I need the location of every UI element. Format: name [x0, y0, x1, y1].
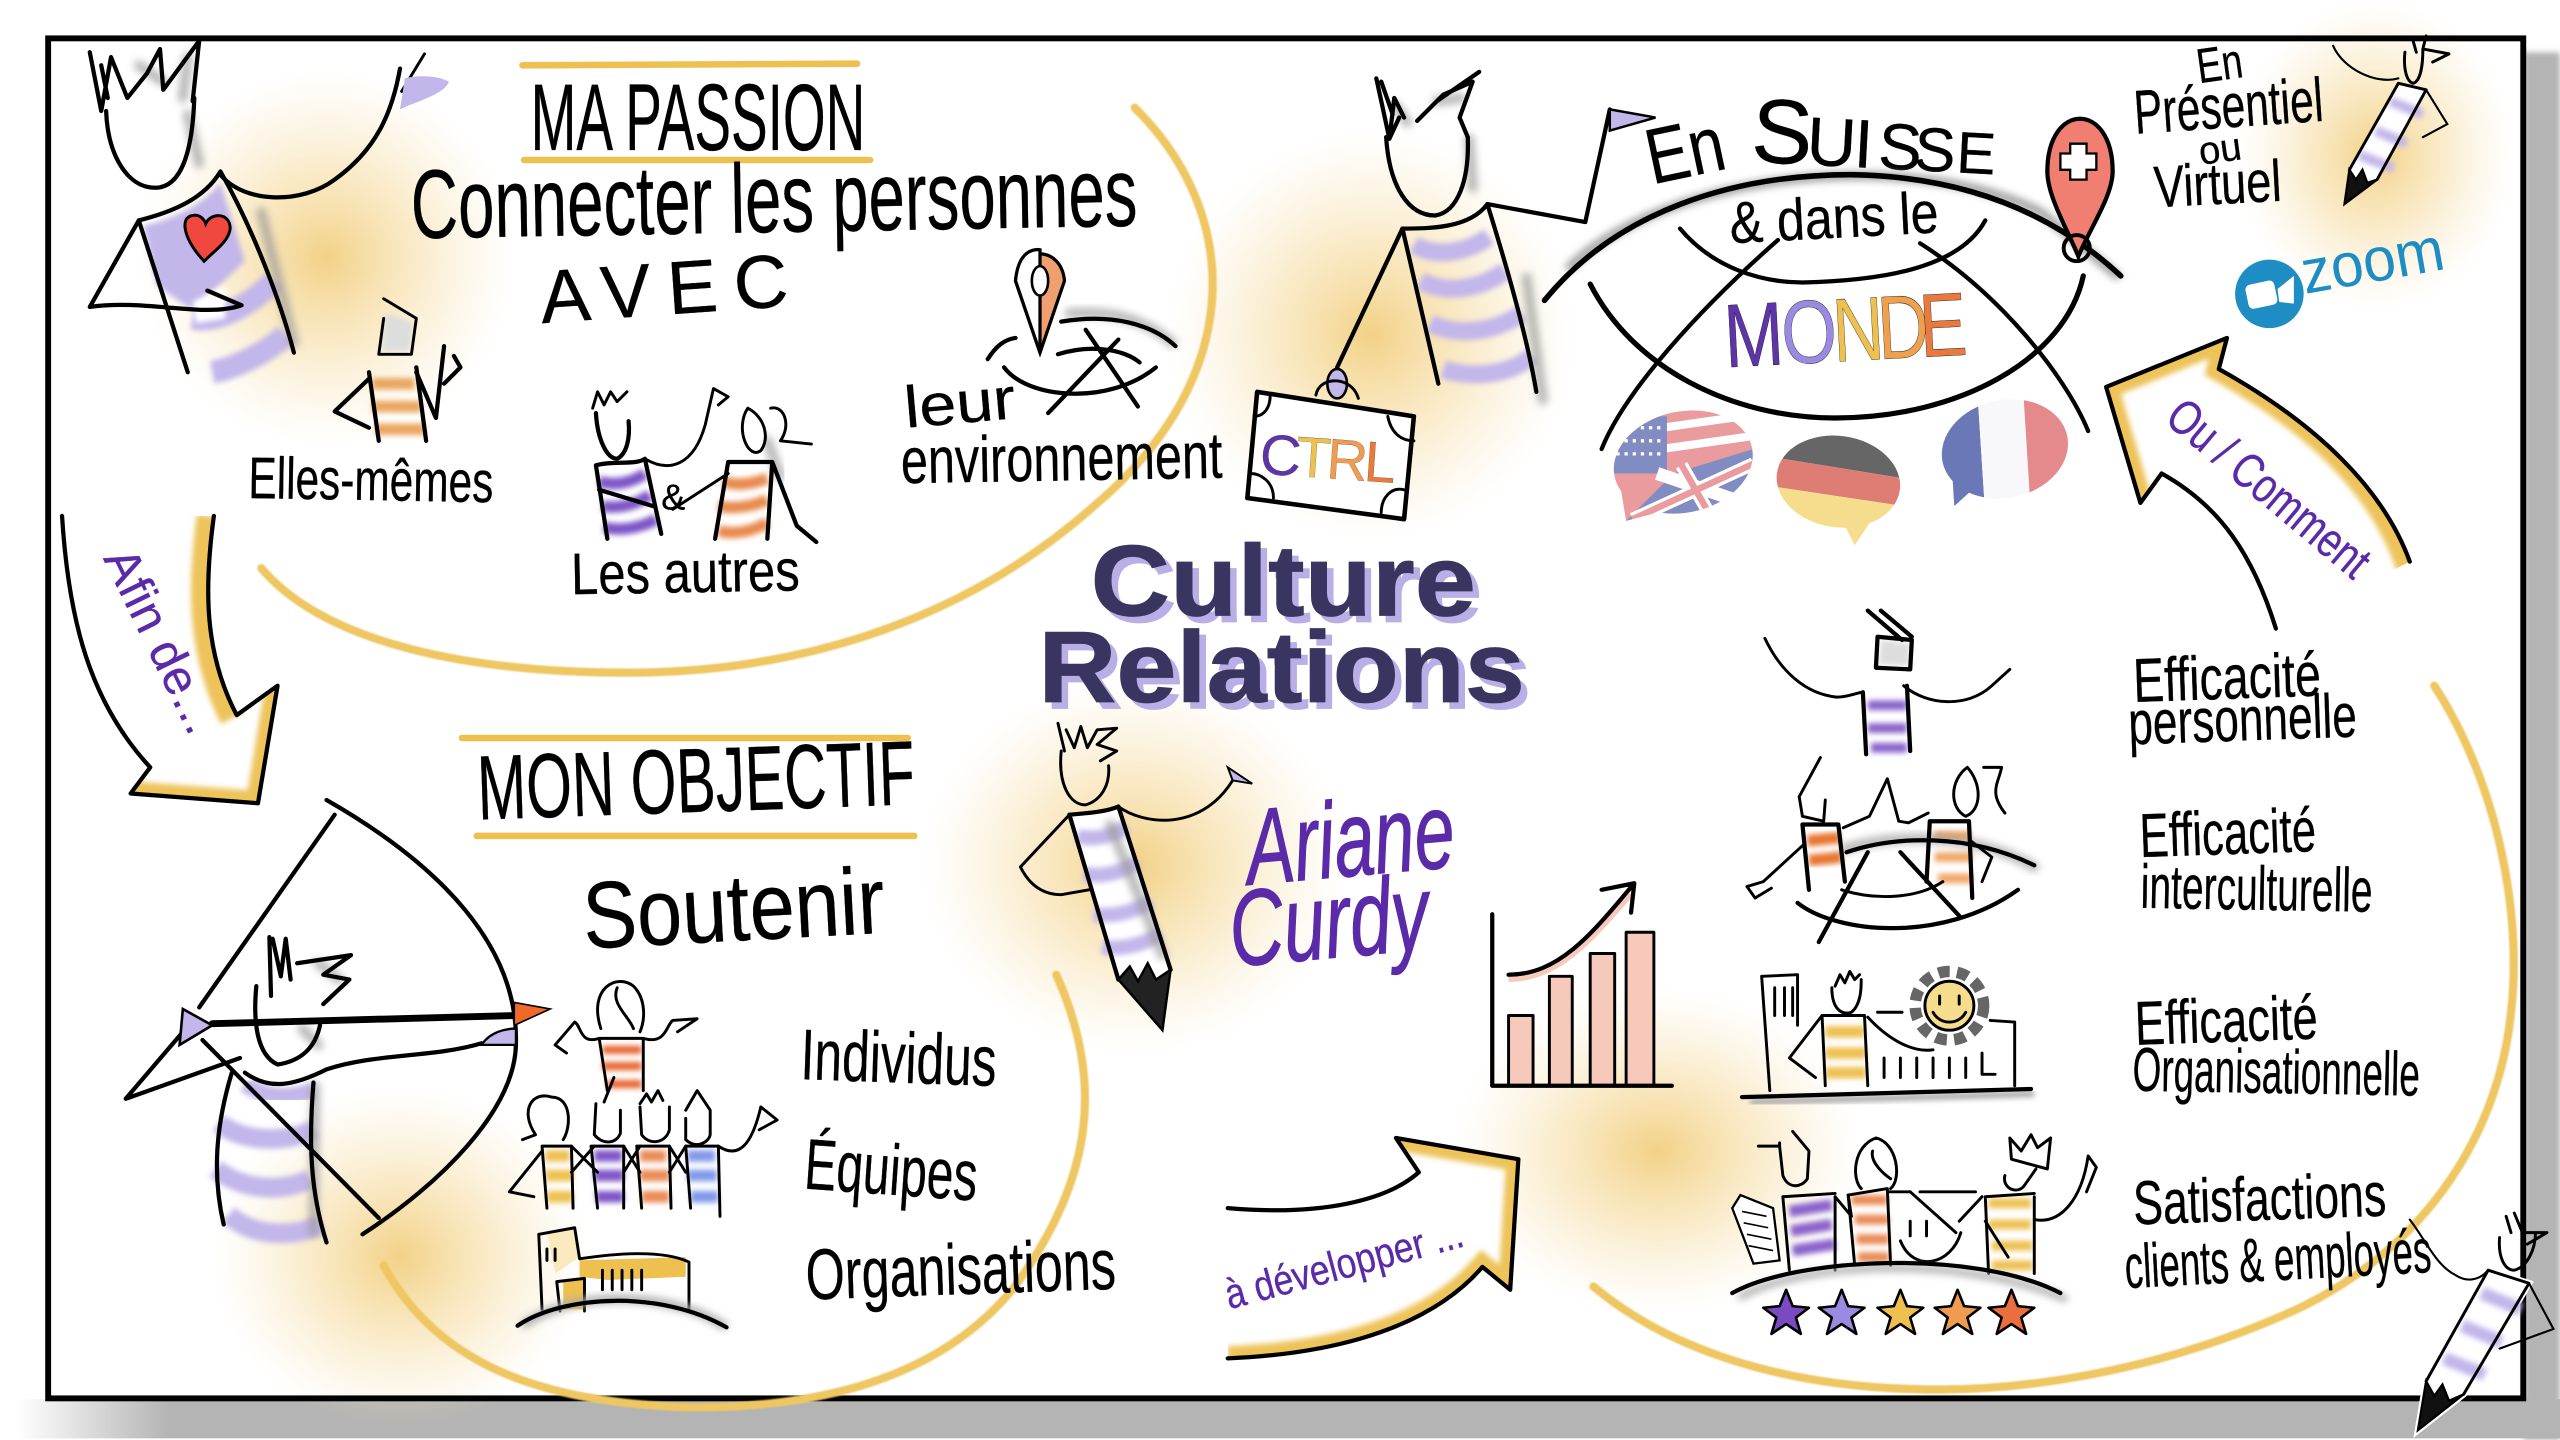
- text: les autres: Les autres: [571, 538, 800, 607]
- text: equipes: Équipes: [802, 1125, 980, 1217]
- text: dans le: & dans le: [1728, 180, 1940, 256]
- text: efficacite personnelle: [2127, 641, 2358, 758]
- panel: efficacite results: [1732, 611, 2553, 1430]
- panel: en presentiel ou virtuel: [2106, 34, 2449, 629]
- text: environnement: environnement: [900, 419, 1223, 497]
- icon: german speech bubble: [1776, 436, 1900, 546]
- icon: pencil character: [1020, 723, 1252, 1030]
- title: culture relations: Culture: [1091, 525, 1476, 638]
- icon: person elles-memes: [335, 299, 460, 441]
- arrow: afin de: [62, 516, 278, 803]
- text: connecter les personnes: Connecter les personnes: [410, 137, 1138, 259]
- text: soutenir: Soutenir: [580, 848, 887, 970]
- icon: globe arcs: [1544, 175, 2121, 449]
- icon: character with suitcase: [1247, 72, 1656, 519]
- label: ou / comment: Ou / Comment: [2156, 388, 2381, 589]
- label: a developper: à développer ...: [1220, 1209, 1468, 1318]
- panel: en suisse et dans le monde: [1247, 72, 2121, 547]
- icon: english speech bubble: [1614, 410, 1753, 521]
- title: culture relations: Relations: [1045, 618, 1531, 731]
- icon: archer with bow: [126, 800, 550, 1242]
- text: monde: MONDE: [1721, 274, 1969, 387]
- text: ariane curdy: Curdy: [1224, 851, 1437, 989]
- arrow: a developper: [1220, 1138, 1518, 1358]
- icon: ctrl suitcase: [1247, 392, 1414, 519]
- text: ariane curdy: Ariane: [1236, 769, 1459, 908]
- text: efficacite organisationnelle: [2132, 984, 2421, 1110]
- text: efficacite personnelle: Efficacité: [2132, 641, 2322, 716]
- icon: organisation and gear: [1742, 971, 2034, 1102]
- text: elles-memes: Elles-mêmes: [248, 446, 494, 515]
- gold curve: results loop: [1593, 686, 2514, 1389]
- text: avec: AVEC: [537, 238, 791, 339]
- icon: two people les autres: &: [661, 476, 685, 517]
- stars rating: [1763, 1290, 2034, 1334]
- text: zoom: zoom: [2296, 215, 2449, 308]
- icon: pin on globe: [988, 250, 1176, 413]
- text: organisations: Organisations: [804, 1225, 1117, 1316]
- label: afin de: Afin de...: [93, 540, 229, 742]
- title: culture relations: [1038, 525, 1531, 731]
- text: virtuel: Virtuel: [2152, 149, 2283, 220]
- panel: mon objectif: [126, 722, 1117, 1327]
- title: culture relations: Relations: [1038, 611, 1525, 724]
- text: efficacite interculturelle: Efficacité: [2138, 796, 2317, 871]
- panel: identity center: [1020, 525, 1531, 1030]
- text: en: En: [2193, 34, 2246, 94]
- icon: satisfied group with stars: [1732, 1131, 2096, 1334]
- text: efficacite interculturelle: [2138, 796, 2373, 926]
- icon: french speech bubble: [1942, 400, 2068, 506]
- icon: pencil character bottom right: [2410, 1213, 2553, 1430]
- text: individus: Individus: [799, 1015, 998, 1102]
- panel: ma passion: [90, 41, 1223, 607]
- title: culture relations: Culture: [1097, 531, 1482, 644]
- icon: building on hill: [518, 1228, 727, 1327]
- icon: zoom logo: [2235, 215, 2449, 328]
- icon: ctrl suitcase: CTRL: [1258, 423, 1398, 496]
- panel: developpement chart: [1220, 883, 1672, 1358]
- icon: personal person: [1765, 611, 2010, 754]
- heading: Ma Passion: MA PASSION: [531, 65, 865, 171]
- icon: pencil character top right: [2333, 36, 2449, 204]
- icon: team pyramid: [509, 981, 777, 1216]
- gold curve: passion loop: [261, 108, 1213, 673]
- icon: intercultural people on globe: [1747, 758, 2034, 942]
- heading: mon objectif: MON OBJECTIF: [476, 722, 916, 840]
- text: satisfactions clients et employes: Satisfactions: [2132, 1161, 2387, 1238]
- icon: main character with heart: [90, 41, 449, 372]
- icon: swiss map pin: [2047, 119, 2113, 261]
- text: efficacite personnelle: personnelle: [2127, 682, 2358, 758]
- icon: two people les autres: [593, 389, 816, 542]
- text: ou: ou: [2196, 125, 2244, 174]
- gold curve: objective loop: [384, 975, 1085, 1407]
- bar chart: [1492, 883, 1672, 1086]
- text: en suisse: [1637, 80, 1999, 201]
- text: en suisse: En: [1637, 99, 1732, 201]
- text: leur: leur: [902, 366, 1018, 441]
- text: efficacite interculturelle: interculturelle: [2140, 853, 2373, 926]
- text: satisfactions clients et employes: [2123, 1161, 2433, 1302]
- text: en suisse: SUISSE: [1749, 80, 1999, 194]
- text: ariane curdy: [1224, 769, 1459, 989]
- arrow: ou / comment: [2106, 338, 2410, 629]
- text: presentiel: Présentiel: [2132, 66, 2325, 148]
- text: efficacite organisationnelle: Efficacité: [2134, 984, 2319, 1059]
